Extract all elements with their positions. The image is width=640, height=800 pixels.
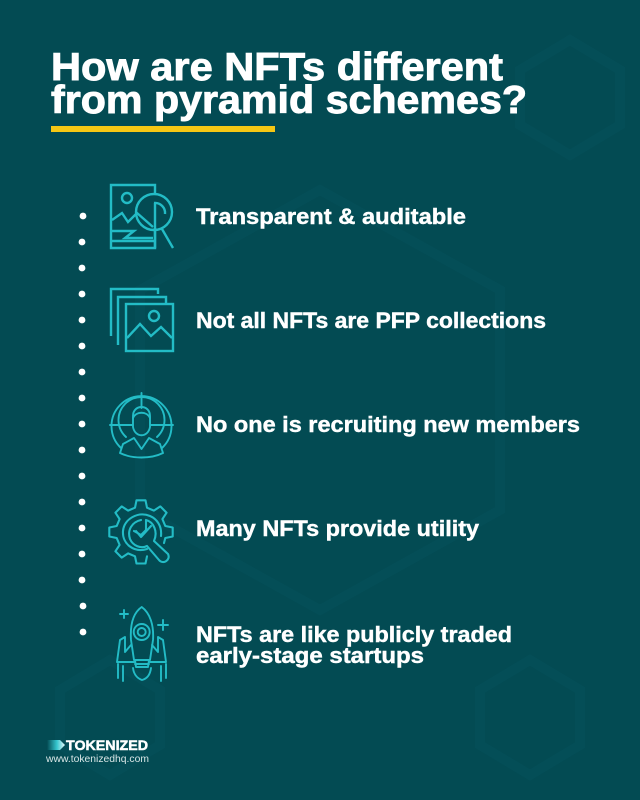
- icon: person in crosshair: [110, 393, 173, 458]
- title: from pyramid schemes?: [51, 79, 527, 122]
- text: startups: [196, 622, 512, 668]
- title underline: [51, 126, 275, 132]
- title: [51, 46, 527, 122]
- logo: TOKENIZED: [66, 737, 148, 753]
- dotted vertical line: [79, 213, 86, 635]
- text: recruiting: No one is recruiting new members: [196, 412, 580, 437]
- text: startups: NFTs are like publicly traded: [196, 622, 512, 647]
- icon: gear and wrench: [109, 500, 173, 564]
- text: transparent: Transparent & auditable: [196, 204, 466, 229]
- icon: rocket: [117, 607, 168, 681]
- text: startups: early-stage startups: [196, 643, 424, 668]
- icon: image stack: [111, 289, 173, 351]
- logo mark: [47, 740, 65, 750]
- title: How are NFTs different: [51, 46, 503, 89]
- text: utility: Many NFTs provide utility: [196, 516, 480, 541]
- icon: image under magnifying glass: [111, 185, 173, 248]
- text: pfp: Not all NFTs are PFP collections: [196, 308, 546, 333]
- website url: www.tokenizedhq.com: [45, 754, 149, 765]
